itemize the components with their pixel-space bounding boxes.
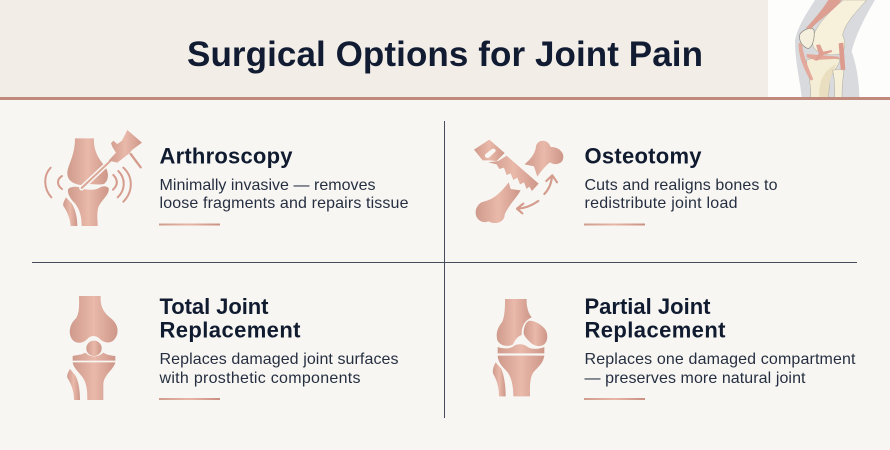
panel: total joint replacement: with prosthetic components (158, 370, 360, 387)
title: Surgical Options for Joint Pain (187, 35, 703, 74)
description: Replaces one damaged compartment (584, 351, 856, 368)
header band (0, 0, 890, 97)
header rule (0, 97, 890, 100)
accent underline (584, 224, 645, 226)
panel: osteotomy (474, 140, 778, 226)
description: Replaces damaged joint surfaces (160, 351, 398, 368)
accent underline (159, 398, 220, 400)
illustration: knee anatomy (768, 0, 890, 97)
panel: arthroscopy: loose fragments and repairs tissue (160, 195, 409, 212)
panel: total joint replacement: Replacement (160, 318, 301, 342)
grid divider: vertical (444, 121, 445, 418)
icon: partial knee implant (493, 299, 547, 396)
panel: partial joint replacement: Replacement (584, 318, 726, 342)
heading: Partial Joint Replacement: Partial Joint (584, 294, 711, 319)
panel: total joint replacement (67, 294, 399, 400)
heading: Osteotomy: Osteotomy (584, 144, 702, 168)
icon: saw and cut bones (474, 140, 563, 223)
heading: Total Joint Replacement: Total Joint (160, 294, 269, 319)
panel: arthroscopy (45, 130, 409, 226)
icon: total knee implant (67, 296, 118, 400)
heading: Arthroscopy: Arthroscopy (160, 144, 293, 168)
accent underline (159, 224, 220, 226)
icon: knee with arthroscope (45, 130, 142, 226)
description: Minimally invasive — removes (160, 177, 376, 194)
panel: partial joint replacement (493, 294, 856, 400)
accent underline (584, 398, 645, 400)
grid divider: horizontal (32, 262, 857, 263)
panel: osteotomy: redistribute joint load (584, 195, 738, 212)
description: Cuts and realigns bones to (584, 177, 778, 194)
panel: partial joint replacement: — preserves more natural joint (584, 370, 806, 387)
